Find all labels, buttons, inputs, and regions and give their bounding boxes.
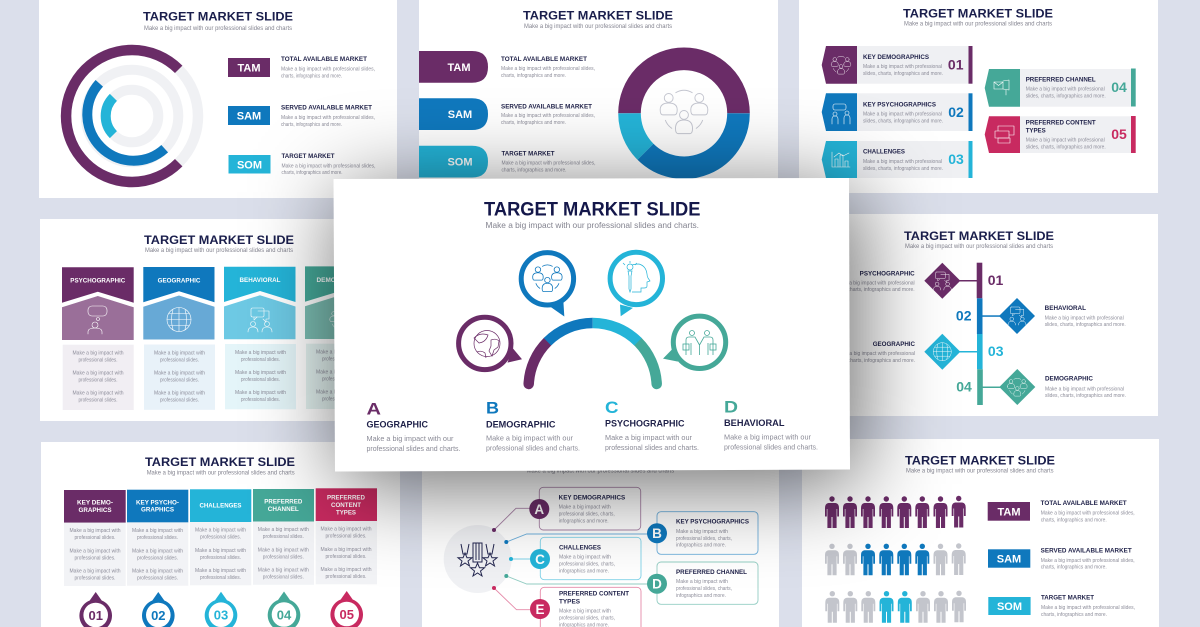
column: psychographic: professional slides. [78, 358, 118, 364]
row: challenges 03: Make a big impact with professional [863, 159, 942, 165]
center slide shadow [341, 192, 858, 484]
row: preferred content types 05: TYPES [1026, 127, 1046, 134]
row: preferred content types 05: slides, charts, infographics and more. [1026, 144, 1106, 150]
text: target market: charts, infographics and more. [282, 170, 342, 176]
card: A key demographics: A [534, 502, 544, 517]
text: geographic: slides, charts, infographics and more. [832, 358, 915, 364]
text: served available market [281, 105, 375, 128]
column: geographic: professional slides. [160, 398, 199, 404]
text block: D behavioral [724, 398, 818, 451]
text block: B demographic: professional slides and charts. [486, 444, 580, 452]
heading: TARGET MARKET SLIDE [903, 7, 1053, 21]
card: C challenges: CHALLENGES [559, 544, 601, 551]
pill: SAM [419, 98, 488, 130]
row: preferred channel 04: slides, charts, infographics and more. [1026, 94, 1106, 100]
row: key demographics 01: KEY DEMOGRAPHICS [863, 54, 929, 61]
card: E preferred content types [530, 587, 641, 627]
column: key demographics: professional slides. [74, 576, 116, 582]
column: preferred content types: CONTENT [331, 502, 361, 509]
subheading: Make a big impact with our professional slides and charts [904, 22, 1052, 28]
column: preferred content types: Make a big impact with [320, 527, 372, 533]
column: demographic: professional slides. [322, 357, 361, 363]
text: target market [502, 151, 596, 174]
heading: TARGET MARKET SLIDE [143, 10, 293, 24]
text: total available market: Make a big impact with professional slides, [281, 66, 375, 72]
icon: cyan bubble head [610, 252, 662, 316]
column: demographic [305, 266, 377, 409]
heading: TARGET MARKET SLIDE [145, 455, 295, 469]
text block: C psychographic: C [605, 398, 618, 417]
pin: 01: 01 [88, 608, 103, 623]
row: key demographics 01: slides, charts, infographics and more. [863, 71, 943, 77]
text: behavioral [1045, 305, 1126, 328]
pill: SOM: SOM [447, 156, 473, 168]
badge: SAM [228, 106, 270, 125]
column: key demographics: Make a big impact with [70, 568, 121, 574]
text: served available market: SERVED AVAILABLE MARKET [281, 105, 372, 112]
card: A key demographics: Make a big impact with [559, 505, 611, 511]
column: behavioral: professional slides. [241, 357, 280, 363]
text block: B demographic: Make a big impact with our [486, 434, 573, 443]
text: demographic: slides, charts, infographics and more. [1045, 393, 1126, 399]
column: demographic: DEMOGRAPHIC [316, 277, 366, 284]
heading: TARGET MARKET SLIDE [484, 198, 700, 220]
column: challenges: professional slides. [200, 555, 241, 561]
row: key psychographics 02: 02 [948, 104, 964, 120]
column: geographic: Make a big impact with [154, 350, 205, 356]
text block: B demographic: DEMOGRAPHIC [486, 419, 556, 429]
card: C challenges: Make a big impact with [559, 555, 611, 561]
row: key demographics 01 [822, 46, 972, 84]
card: A key demographics: professional slides, charts, [559, 512, 615, 518]
row: preferred channel 04: PREFERRED CHANNEL [1026, 77, 1096, 84]
column: demographic: Make a big impact with [316, 370, 367, 376]
pill: SAM: SAM [448, 109, 472, 121]
text: served available market [501, 103, 595, 126]
panel: donut TAM SAM SOM slide [419, 0, 778, 185]
column: demographic: professional slides. [322, 377, 361, 383]
column: behavioral: Make a big impact with [235, 350, 286, 356]
icon: purple diamond [924, 263, 960, 299]
numbers: 01 [988, 272, 1003, 288]
heading: TARGET MARKET SLIDE [904, 229, 1054, 243]
pin: 04 [268, 592, 300, 627]
text: total available market: charts, infographics and more. [281, 74, 342, 80]
card: B key psychographics: professional slides, charts, [676, 536, 732, 542]
text block: C psychographic: Make a big impact with our [605, 433, 692, 442]
card: B key psychographics: KEY PSYCHOGRAPHICS [676, 519, 749, 526]
text block: D behavioral: professional slides and charts. [724, 442, 818, 451]
pin: 05 [330, 591, 363, 627]
text: served available market: charts, infographics and more. [281, 122, 342, 128]
row: preferred channel 04: Make a big impact with professional [1026, 87, 1105, 93]
panel: chevron columns slide [40, 219, 400, 421]
text: target market: TARGET MARKET [1041, 595, 1094, 602]
column: geographic: GEOGRAPHIC [158, 277, 201, 284]
badge: SAM: SAM [237, 110, 261, 122]
card: D preferred channel: infographics and more. [676, 593, 726, 599]
text: total available market: charts, infographics and more. [501, 73, 566, 79]
card: A key demographics: infographics and more. [559, 518, 609, 524]
card: C challenges: C [535, 552, 545, 567]
connector: B [504, 534, 648, 544]
column: preferred channel: Make a big impact with [258, 548, 309, 554]
text: behavioral: slides, charts, infographics and more. [1045, 322, 1126, 328]
text: psychographic [832, 270, 915, 293]
column: psychographic: professional slides. [78, 378, 118, 384]
pictogram row: TAM [825, 496, 966, 528]
text: served available market: Make a big impact with professional slides, [501, 113, 595, 119]
column: key psychographics: Make a big impact with [132, 548, 183, 554]
icon: green diamond [999, 369, 1035, 405]
card: D preferred channel [647, 562, 758, 604]
card: E preferred content types: TYPES [559, 598, 580, 605]
text: target market: charts, infographics and more. [1041, 612, 1107, 618]
column: key demographics: professional slides. [74, 535, 116, 541]
badge: TAM [988, 502, 1030, 521]
pin: 02: 02 [151, 608, 166, 623]
text: psychographic: Make a big impact with professional [835, 280, 915, 286]
icon: green bubble handshake [663, 316, 726, 368]
row: challenges 03: CHALLENGES [863, 149, 905, 156]
text: target market: TARGET MARKET [282, 153, 335, 160]
subheading: Make a big impact with our professional slides and charts [905, 244, 1053, 250]
connector: C [509, 557, 532, 561]
column: behavioral: Make a big impact with [235, 390, 286, 396]
pill: TAM: TAM [447, 62, 471, 74]
column: behavioral: Make a big impact with [235, 370, 286, 376]
column: behavioral: professional slides. [241, 377, 280, 383]
connector: D [504, 574, 648, 584]
column: key demographics [64, 490, 126, 586]
row: key psychographics 02: KEY PSYCHOGRAPHICS [863, 101, 936, 108]
column: psychographic: PSYCHOGRAPHIC [70, 278, 126, 285]
column: demographic: Make a big impact with [316, 350, 367, 356]
column: preferred content types: professional slides. [326, 554, 366, 560]
pictogram row: SAM [825, 543, 966, 575]
column: preferred content types [316, 488, 377, 584]
column: geographic: Make a big impact with [154, 370, 205, 376]
text: demographic: Make a big impact with professional [1045, 386, 1124, 392]
numbers: 03 [988, 343, 1004, 359]
column: preferred channel: professional slides. [263, 534, 304, 540]
icon: blue bubble people [521, 253, 574, 316]
text: total available market [281, 56, 375, 80]
badge: TAM: TAM [237, 62, 261, 74]
column: preferred channel: professional slides. [263, 574, 304, 580]
row: key demographics 01: Make a big impact with professional [863, 64, 942, 70]
text: total available market: Make a big impact with professional slides, [501, 66, 595, 72]
column: geographic: Make a big impact with [154, 390, 205, 396]
column: key demographics: Make a big impact with [70, 548, 121, 554]
column: challenges: professional slides. [200, 534, 241, 540]
column: preferred content types: TYPES [336, 509, 357, 516]
column: psychographic: professional slides. [78, 398, 118, 404]
subheading: Make a big impact with our professional slides and charts [147, 470, 295, 476]
text: behavioral: Make a big impact with professional [1045, 316, 1124, 322]
text block: C psychographic [605, 398, 699, 452]
text: demographic: DEMOGRAPHIC [1045, 376, 1094, 383]
row: challenges 03: 03 [948, 151, 964, 167]
column: preferred channel: professional slides. [263, 554, 304, 560]
icon: blue diamond [999, 298, 1035, 334]
chart: donut [630, 59, 738, 168]
connector: E [492, 586, 532, 610]
text: target market [1041, 595, 1135, 618]
text: total available market: TOTAL AVAILABLE MARKET [281, 56, 367, 63]
text: target market: Make a big impact with professional slides, [282, 164, 376, 170]
text block: A geographic [366, 399, 460, 453]
text: served available market: charts, infographics and more. [501, 120, 566, 126]
text block: C psychographic: PSYCHOGRAPHIC [605, 419, 685, 429]
text block: D behavioral: BEHAVIORAL [724, 418, 785, 428]
text: target market: charts, infographics and more. [502, 168, 566, 174]
text block: D behavioral: Make a big impact with our [724, 432, 811, 442]
card: A key demographics: KEY DEMOGRAPHICS [559, 494, 625, 501]
row: key demographics 01: 01 [948, 56, 964, 72]
text: served available market: SERVED AVAILABLE MARKET [1041, 547, 1132, 554]
icon: purple bubble globe [459, 317, 522, 370]
card: E preferred content types: E [535, 602, 545, 617]
numbers: 04 [956, 379, 972, 395]
panel: people pictogram slide [802, 439, 1159, 627]
column: preferred content types: Make a big impact with [320, 567, 372, 573]
heading: TARGET MARKET SLIDE [144, 233, 294, 247]
column: psychographic: Make a big impact with [72, 351, 124, 357]
card: A key demographics [529, 487, 641, 530]
text: total available market [501, 56, 595, 79]
text block: D behavioral: D [724, 398, 738, 416]
column: demographic: Make a big impact with [316, 390, 367, 396]
text: target market: Make a big impact with professional slides, [1041, 605, 1135, 611]
column: geographic: professional slides. [160, 378, 199, 384]
text block: B demographic: B [486, 399, 499, 418]
column: challenges: Make a big impact with [195, 548, 246, 554]
text block: A geographic: professional slides and charts. [366, 444, 460, 453]
text: geographic: GEOGRAPHIC [873, 341, 916, 348]
card: D preferred channel: Make a big impact with [676, 579, 728, 585]
text: total available market [1041, 500, 1135, 524]
panel: table with numbered pins slide [41, 442, 400, 627]
column: behavioral [224, 267, 296, 409]
row: preferred content types 05: PREFERRED CONTENT [1026, 120, 1096, 127]
row: key psychographics 02: slides, charts, infographics and more. [863, 118, 943, 124]
text: geographic: Make a big impact with professional [836, 351, 915, 357]
column: psychographic: Make a big impact with [72, 391, 124, 397]
row: preferred channel 04: 04 [1111, 79, 1127, 95]
card: D preferred channel: D [652, 576, 662, 592]
column: key demographics: KEY DEMO- [77, 500, 113, 507]
column: challenges: CHALLENGES [200, 503, 242, 510]
pill: TAM [419, 51, 488, 83]
column: demographic: professional slides. [322, 397, 361, 403]
panel: center featured slide [334, 178, 850, 472]
card: E preferred content types: PREFERRED CONTENT [559, 591, 629, 598]
column: preferred content types: PREFERRED [327, 495, 365, 502]
badge: SOM: SOM [237, 160, 262, 172]
pin: 04: 04 [277, 607, 292, 622]
text block: A geographic: GEOGRAPHIC [366, 420, 428, 430]
column: behavioral: BEHAVIORAL [240, 277, 281, 284]
row: key psychographics 02 [822, 93, 972, 131]
subheading: Make a big impact with our professional slides and charts [524, 24, 672, 30]
chart: concentric rings [66, 50, 198, 182]
pictogram row: SOM [825, 591, 966, 623]
text: target market: Make a big impact with professional slides, [502, 160, 596, 166]
subheading: Make a big impact with our professional slides and charts. [486, 220, 699, 230]
column: key psychographics [127, 490, 188, 586]
column: geographic: professional slides. [160, 358, 199, 364]
card: B key psychographics: Make a big impact with [676, 529, 728, 535]
badge: SOM [228, 155, 270, 174]
column: key psychographics: professional slides. [137, 555, 178, 561]
text: served available market: Make a big impact with professional slides, [1041, 558, 1135, 564]
column: key psychographics: professional slides. [137, 575, 178, 581]
row: preferred content types 05: Make a big impact with professional [1026, 137, 1105, 143]
row: challenges 03 [822, 141, 972, 178]
card: C challenges [530, 537, 641, 580]
badge: TAM: TAM [997, 506, 1021, 518]
text: total available market: charts, infographics and more. [1041, 518, 1107, 524]
column: key demographics: GRAPHICS [78, 507, 112, 514]
text: served available market: Make a big impact with professional slides, [281, 115, 375, 121]
column: challenges: Make a big impact with [195, 568, 246, 574]
panel: medal hub diagram slide [422, 460, 779, 627]
panel: diamond timeline slide [800, 214, 1158, 416]
column: preferred channel: Make a big impact with [258, 527, 309, 533]
text: target market: TARGET MARKET [502, 151, 555, 158]
text: total available market: Make a big impact with professional slides, [1041, 511, 1135, 517]
column: preferred channel: PREFERRED [264, 498, 303, 506]
text: total available market: TOTAL AVAILABLE MARKET [501, 56, 587, 63]
row: preferred channel 04 [985, 68, 1136, 107]
subheading: Make a big impact with our professional slides and charts [527, 469, 674, 475]
column: preferred content types: professional slides. [326, 574, 366, 580]
pin: 05: 05 [339, 607, 354, 622]
card: D preferred channel: PREFERRED CHANNEL [676, 569, 747, 576]
card: C challenges: infographics and more. [559, 569, 609, 575]
hub: medals icon [444, 525, 512, 593]
chart: semicircle arc [529, 323, 657, 384]
text block: C psychographic: professional slides and charts. [605, 443, 699, 452]
column: geographic [143, 267, 215, 410]
text: total available market: TOTAL AVAILABLE MARKET [1041, 500, 1127, 507]
text: target market [282, 153, 376, 176]
card: D preferred channel: professional slides, charts, [676, 586, 732, 592]
row: preferred content types 05: 05 [1111, 126, 1127, 142]
panel: rings TAM SAM SOM slide [39, 0, 397, 198]
pin: 03 [205, 592, 237, 627]
card: B key psychographics [647, 512, 758, 554]
column: key demographics: professional slides. [74, 556, 116, 562]
card: E preferred content types: Make a big impact with [559, 608, 611, 614]
icon: cyan diamond [924, 334, 960, 370]
numbers: 02 [956, 308, 972, 324]
subheading: Make a big impact with our professional slides and charts [144, 26, 292, 32]
row: key psychographics 02: Make a big impact with professional [863, 111, 942, 117]
card: E preferred content types: professional slides, charts, [559, 616, 615, 622]
text: served available market: SERVED AVAILABLE MARKET [501, 103, 592, 110]
badge: SOM [988, 597, 1031, 615]
text: geographic [832, 341, 916, 364]
badge: SOM: SOM [997, 601, 1022, 613]
connector: A [492, 508, 530, 532]
column: key psychographics: GRAPHICS [141, 507, 175, 514]
text block: B demographic [486, 399, 580, 452]
row: challenges 03: slides, charts, infographics and more. [863, 166, 943, 172]
pin: 01 [79, 592, 112, 627]
column: key psychographics: KEY PSYCHO- [136, 499, 179, 506]
text: served available market: charts, infographics and more. [1041, 565, 1107, 571]
badge: TAM [228, 58, 270, 77]
text block: A geographic: A [366, 399, 381, 418]
column: key psychographics: professional slides. [137, 535, 178, 541]
badge: SAM [988, 549, 1030, 568]
text: behavioral: BEHAVIORAL [1045, 305, 1086, 312]
column: key demographics: Make a big impact with [70, 528, 121, 534]
heading: TARGET MARKET SLIDE [523, 8, 673, 22]
timeline bar and connectors [958, 263, 1002, 405]
heading: TARGET MARKET SLIDE [905, 453, 1055, 467]
column: preferred content types: Make a big impact with [320, 547, 372, 553]
text: demographic [1045, 376, 1126, 399]
numbers [956, 272, 1004, 395]
column: challenges: Make a big impact with [195, 528, 246, 534]
column: key psychographics: Make a big impact with [132, 528, 183, 534]
card: B key psychographics: B [652, 526, 662, 541]
column: behavioral: professional slides. [241, 397, 280, 403]
column: challenges: professional slides. [200, 575, 241, 581]
row: preferred content types 05 [985, 116, 1136, 153]
column: psychographic [62, 267, 134, 410]
column: preferred content types: professional slides. [326, 534, 366, 540]
pin: 03: 03 [214, 608, 228, 623]
column: preferred channel [253, 489, 314, 585]
subheading: Make a big impact with our professional slides and charts [145, 248, 293, 254]
column: psychographic: Make a big impact with [72, 371, 124, 377]
icon: people group [660, 90, 708, 134]
column: key psychographics: Make a big impact with [132, 568, 183, 574]
badge: SAM: SAM [997, 554, 1021, 566]
pin: 02 [142, 592, 175, 627]
panel: five tags slide [799, 0, 1158, 193]
text: psychographic: slides, charts, infographics and more. [832, 287, 915, 293]
text: psychographic: PSYCHOGRAPHIC [860, 270, 915, 277]
text block: A geographic: Make a big impact with our [366, 434, 454, 443]
subheading: Make a big impact with our professional slides and charts [906, 469, 1054, 475]
card: B key psychographics: infographics and more. [676, 543, 726, 549]
pill: SOM [419, 146, 488, 178]
text: served available market [1041, 547, 1135, 571]
card: C challenges: professional slides, charts, [559, 562, 615, 568]
column: challenges [190, 489, 251, 585]
column: preferred channel: CHANNEL [268, 506, 299, 513]
column: preferred channel: Make a big impact with [258, 568, 309, 574]
